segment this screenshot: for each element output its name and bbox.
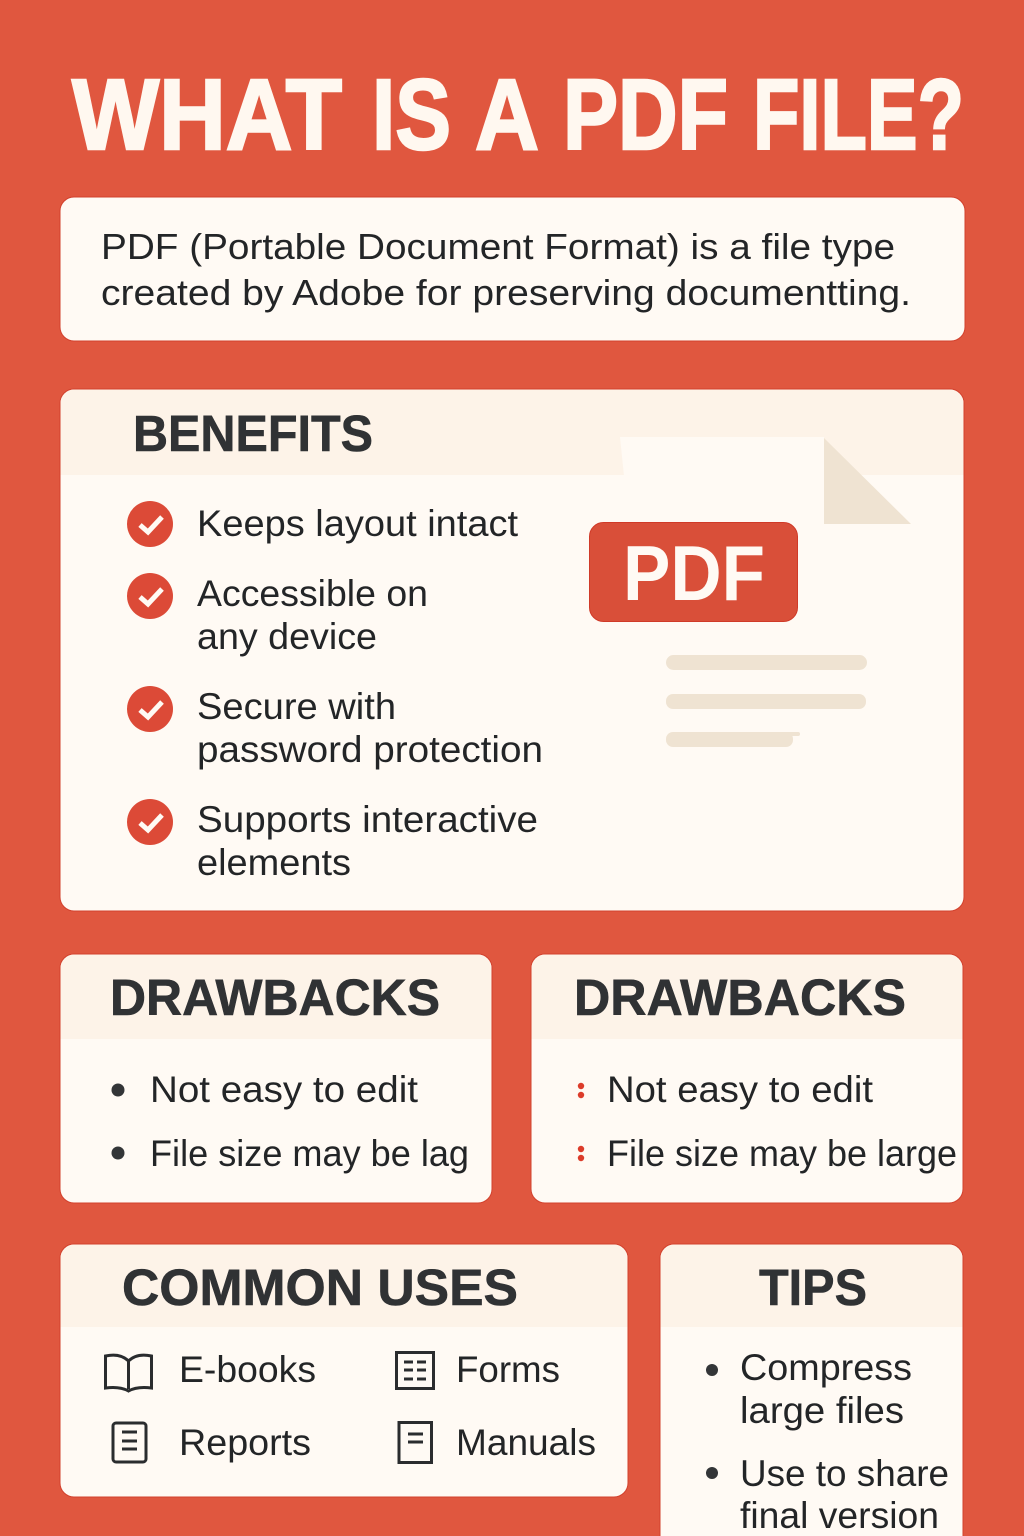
drawback list <box>578 1069 957 1174</box>
definition text: created by Adobe for preserving documentting. <box>101 272 911 313</box>
heading: benefits: BENEFITS <box>133 405 373 462</box>
panel: tips <box>660 1244 963 1536</box>
benefit: supports interactive elements: Supports interactive <box>197 799 538 840</box>
use: reports: Reports <box>179 1422 311 1463</box>
use: manuals: Manuals <box>456 1422 596 1463</box>
benefit: secure with password protection: Secure with <box>197 686 396 727</box>
panel: definition <box>60 197 965 341</box>
heading: drawbacks: DRAWBACKS <box>110 969 440 1026</box>
title <box>72 59 964 171</box>
tip: compress large files: large files <box>740 1390 904 1431</box>
tip: use to share final version: Use to share <box>740 1453 949 1494</box>
use: forms: Forms <box>456 1349 560 1390</box>
use: e-books: E-books <box>179 1349 316 1390</box>
tip: use to share final version <box>706 1453 949 1536</box>
title: A <box>475 59 539 171</box>
benefit: accessible on any device: any device <box>197 616 377 657</box>
icon: pdf document <box>590 437 911 747</box>
definition text: PDF (Portable Document Format) is a file type <box>101 226 895 267</box>
benefit: keeps layout intact: Keeps layout intact <box>197 503 519 544</box>
panel: common uses <box>60 1244 628 1497</box>
definition text <box>101 226 911 313</box>
use: forms <box>396 1349 560 1390</box>
benefit: secure with password protection <box>127 686 543 770</box>
benefit: secure with password protection: password protection <box>197 729 543 770</box>
icon: pdf document: PDF <box>623 529 765 617</box>
benefit: accessible on any device <box>127 573 428 657</box>
panel: drawbacks left <box>60 954 492 1203</box>
title: IS <box>372 59 451 171</box>
panel: benefits <box>60 389 964 911</box>
title: WHAT <box>72 59 342 171</box>
drawback list: Not easy to edit <box>150 1069 419 1110</box>
use: reports <box>113 1422 311 1463</box>
drawback list: Not easy to edit <box>607 1069 874 1110</box>
heading: tips: TIPS <box>759 1259 867 1316</box>
benefit: supports interactive elements: elements <box>197 842 351 883</box>
heading: common uses: COMMON USES <box>122 1259 518 1316</box>
tip: compress large files <box>706 1347 912 1431</box>
panel: drawbacks right <box>531 954 963 1203</box>
title: PDF <box>563 59 728 171</box>
title: FILE? <box>753 59 964 171</box>
use: e-books <box>106 1349 316 1391</box>
heading: drawbacks: DRAWBACKS <box>574 969 906 1026</box>
tip: use to share final version: final version <box>740 1495 939 1536</box>
drawback list: File size may be lag <box>150 1133 469 1174</box>
benefit: supports interactive elements <box>127 799 538 883</box>
drawback list <box>112 1069 469 1174</box>
tip: compress large files: Compress <box>740 1347 912 1388</box>
drawback list: File size may be large <box>607 1133 957 1174</box>
benefit: accessible on any device: Accessible on <box>197 573 428 614</box>
